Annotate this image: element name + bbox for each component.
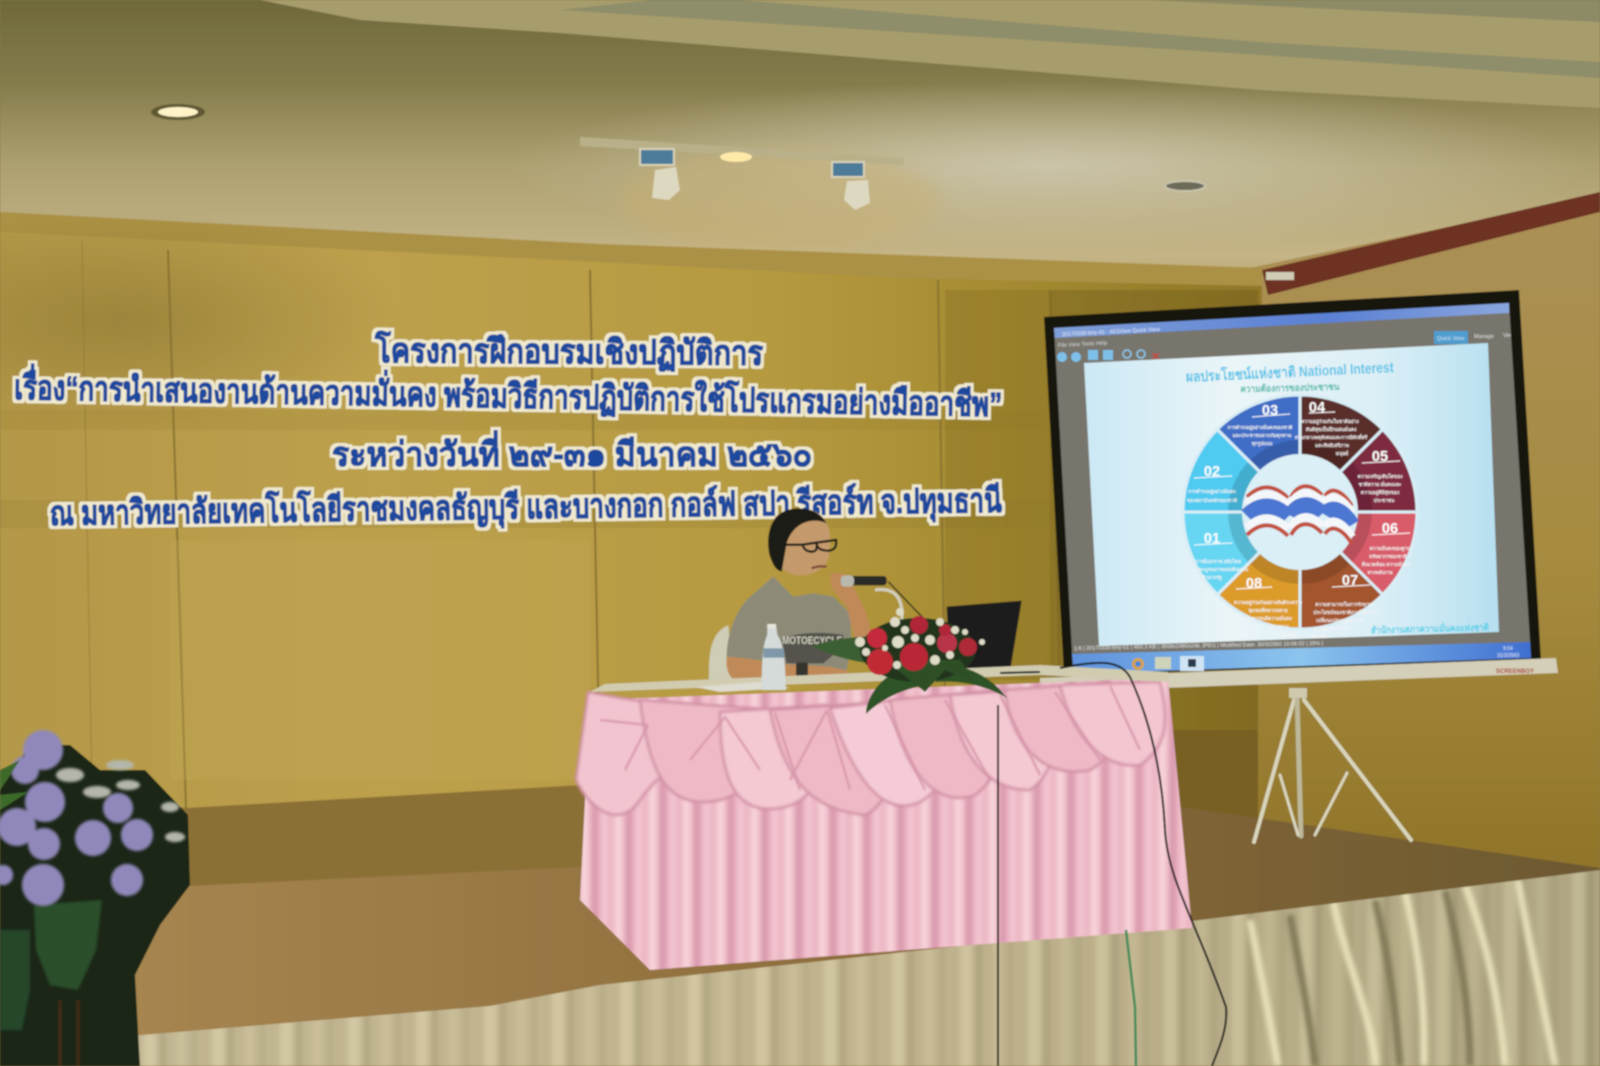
blossoms [0, 730, 153, 906]
window menu and toolbar: ✕ [1151, 351, 1160, 363]
ceiling downlight right [1165, 181, 1205, 191]
segment 05 [1300, 429, 1417, 512]
slide [1084, 343, 1499, 646]
taskbar [1072, 642, 1531, 674]
track lighting [580, 137, 904, 210]
segment 08 [1217, 512, 1300, 629]
green cable [1126, 930, 1136, 1066]
wheel descriptions: ของสถาบันหลักของชาติ [1187, 497, 1237, 504]
arms [726, 572, 871, 684]
wheel descriptions: สันติสุขเป็นปึกแผ่นมั่นคง [1306, 425, 1357, 433]
wheel numbers [1204, 400, 1398, 592]
chair [709, 625, 733, 683]
taskbar: 31/3/2560 [1497, 653, 1519, 659]
red carnations [867, 616, 977, 675]
screen case frame [1044, 290, 1541, 675]
banner heading text [14, 330, 1002, 535]
stage floor [120, 806, 1600, 1036]
projection screen [1044, 290, 1541, 675]
slide source: สำนักงานสภาความมั่นคงแห่งชาติ [1371, 619, 1489, 637]
wheel descriptions: ทางพลังงาน [1368, 569, 1393, 576]
taskbar: 9:04 [1503, 646, 1513, 652]
right wall [1200, 195, 1600, 880]
window title bar: 20170330-bny-01 - ACDSee Quick View [1062, 327, 1160, 338]
watch [796, 663, 808, 676]
window menu and toolbar: File View Tools Help [1058, 340, 1107, 349]
wheel descriptions: ความอยู่ร่วมกันอย่างสันติระหว่าง [1234, 599, 1303, 607]
water bottle [762, 624, 786, 690]
t-shirt [727, 577, 852, 670]
wheel numbers: 06 [1382, 521, 1398, 537]
segment 07 [1300, 512, 1383, 629]
lower wall below curtain [150, 780, 1258, 900]
segment 03 [1217, 395, 1300, 512]
presenter [709, 508, 1022, 684]
brown beam [1262, 192, 1600, 295]
slide subtitle: ความต้องการของประชาชน [1240, 381, 1340, 395]
wheel numbers: 01 [1204, 531, 1220, 547]
wheel descriptions: ประเทศ [1310, 633, 1327, 640]
cables [998, 663, 1226, 1066]
ceiling downlight left [151, 104, 205, 120]
curtain backdrop [0, 210, 1262, 808]
status bar: 1:6 | 20170330-bny-01 | 460.3 KB | 3508x2480x24b JPEG | Modified Date: 30/3/2560 10:06:02 | 25% | [1074, 641, 1323, 652]
wheel numbers: 04 [1309, 400, 1325, 416]
screen roller case: SCREENBOY [1496, 669, 1534, 675]
fern fronds [34, 900, 102, 990]
wheel descriptions: และบูรณภาพแห่งดินแดน [1196, 566, 1249, 574]
beam bracket [1266, 272, 1294, 280]
wheel descriptions: ความสามารถในการรักษาผล [1315, 601, 1375, 608]
slide title: ผลประโยชน์แห่งชาติ National Interest [1185, 358, 1394, 386]
papers on table [695, 682, 790, 692]
wheel descriptions: มนุษย์ [1336, 450, 1348, 457]
wheel descriptions: และประชาชนจากภัยคุกคาม [1233, 432, 1291, 439]
ferns [812, 637, 905, 664]
wheel descriptions: โดยเฉพาะ [1266, 623, 1289, 630]
microphone [841, 575, 923, 620]
foliage [0, 745, 190, 1066]
white filler flowers [855, 608, 985, 669]
wheel numbers: 08 [1246, 576, 1262, 592]
window backdrop [1054, 303, 1531, 670]
wheel descriptions: สิ่งแวดล้อม ความมั่นคง [1362, 560, 1411, 568]
wheel numbers: 05 [1372, 449, 1388, 465]
wheel descriptions: ประชาชน [1374, 497, 1395, 504]
wheel descriptions: อำนาจรัฐ [1202, 574, 1222, 581]
left flower arrangement [0, 730, 190, 1066]
wheel descriptions: ความเจริญเติบโตของ [1358, 473, 1403, 480]
cream stage skirt [120, 860, 1600, 1066]
window menu and toolbar [1057, 331, 1511, 363]
wheel descriptions [1187, 418, 1411, 640]
segment 02 [1183, 429, 1300, 512]
swags [576, 682, 1165, 815]
ceiling [0, 0, 1600, 300]
laptop [947, 601, 1022, 675]
wheel hub [1242, 454, 1358, 570]
banner line 2: เรื่อง“การนำเสนองานด้านความมั่นคง พร้อมวิธีการปฏิบัติการใช้โปรแกรมอย่างมืออาชีพ” [14, 363, 1002, 424]
wheel descriptions: และสิทธิเสรีภาพ [1315, 442, 1349, 449]
wheel descriptions: ท่ามกลางพหุสังคมและการมีศักดิ์ศรี [1295, 433, 1368, 441]
wheel chart [1183, 395, 1417, 629]
wheel descriptions: ประโยชน์ของชาติภายใต้ความ [1313, 609, 1377, 616]
segment 04 [1300, 395, 1383, 512]
glasses [784, 540, 836, 552]
wheel numbers: 03 [1262, 403, 1278, 419]
flower arrangement on table [812, 608, 1007, 714]
wheel numbers: 02 [1204, 464, 1220, 480]
wheel descriptions: แวดล้อมระหว่าง [1315, 625, 1350, 632]
table top [590, 665, 1168, 692]
window menu and toolbar: Vie [1503, 333, 1511, 339]
banner line 4: ณ มหาวิทยาลัยเทคโนโลยีราชมงคลธัญบุรี และบางกอก กอล์ฟ สปา รีสอร์ท จ.ปทุมธานี [50, 480, 1002, 535]
screen roller case [1040, 658, 1558, 692]
wheel descriptions: การมีเอกราช อธิปไตย [1195, 558, 1241, 565]
wheel descriptions: ประชาชนมีความมั่นคง [1244, 614, 1292, 622]
pale filler sprays [56, 760, 185, 842]
segment 01 [1183, 512, 1300, 595]
banner line 3: ระหว่างวันที่ ๒๙-๓๑ มีนาคม ๒๕๖๐ [332, 430, 812, 474]
segment 06 [1300, 512, 1417, 595]
icon: Thai flag [1247, 486, 1352, 544]
wheel descriptions: การดำรงอยู่อย่างมั่นคงของชาติ [1228, 423, 1292, 432]
window menu and toolbar: Quick View [1437, 336, 1464, 342]
wheel descriptions: ทรัพยากรของชาติ [1369, 553, 1407, 560]
wheel descriptions: เปลี่ยนแปลงของสภาวะ [1316, 616, 1364, 624]
head [768, 508, 836, 575]
wheel descriptions: สังคมดี [1283, 631, 1297, 638]
wheel numbers: 07 [1342, 573, 1358, 589]
window title bar [1054, 303, 1509, 338]
wheel descriptions: ชาติความ มั่นคงและ [1359, 480, 1402, 488]
wheel descriptions: ความอยู่ดีมีสุขของ [1361, 489, 1400, 497]
wheel descriptions: ทุกรูปแบบ [1252, 440, 1272, 448]
tripod stand [1254, 688, 1411, 842]
wheel descriptions: ชุมชนที่หลากหลาย [1248, 606, 1288, 614]
banner line 1: โครงการฝึกอบรมเชิงปฏิบัติการ [374, 330, 764, 373]
t-shirt: MOTOECYCLE [782, 635, 842, 647]
wheel descriptions: ความอยู่ร่วมกันในชาติอย่าง [1301, 418, 1359, 426]
pink table skirt [570, 665, 1200, 980]
wheel descriptions: การดำรงอยู่อย่างมั่นคง [1188, 487, 1236, 496]
window menu and toolbar: Manage [1474, 334, 1494, 340]
wheel descriptions: ความมั่นคงของฐาน [1370, 544, 1411, 552]
